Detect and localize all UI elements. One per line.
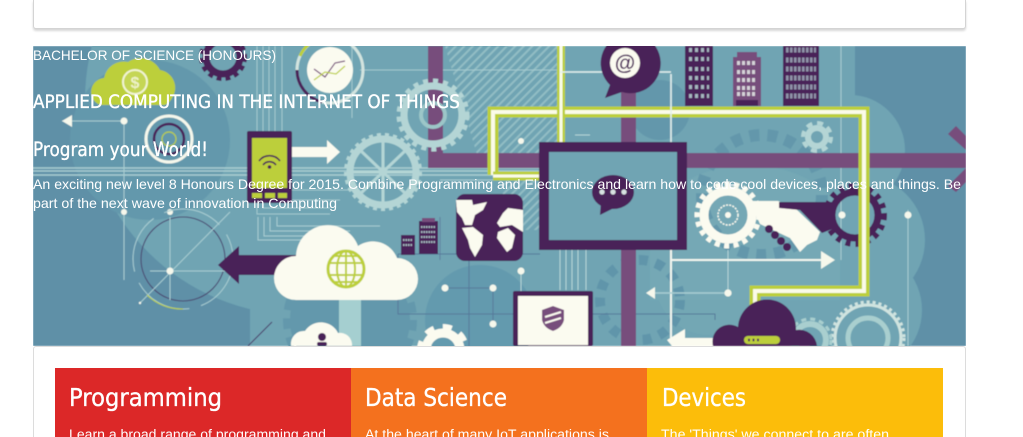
tagline: Program your World! [33, 138, 208, 161]
buildings [685, 46, 819, 106]
right arrow head [821, 251, 835, 269]
yellow-green circuit lines [493, 46, 864, 340]
degree label: BACHELOR OF SCIENCE (HONOURS) [33, 47, 276, 63]
green cloud with coin: $ [131, 75, 140, 92]
description line two: part of the next wave of innovation in Computing [33, 195, 337, 211]
small node dots [120, 118, 912, 328]
dark cloud with pill [712, 299, 817, 346]
banner illustration [33, 46, 966, 346]
small left arrow near dot [646, 287, 732, 299]
white cloud with globe [274, 225, 418, 300]
course title: APPLIED COMPUTING IN THE INTERNET OF THINGS [33, 91, 460, 113]
panel: programming [55, 368, 351, 437]
panel: devices [647, 368, 943, 437]
phone with wifi [247, 131, 292, 203]
stem under cloud [339, 298, 361, 346]
circuit lines [33, 46, 908, 346]
devices heading: Devices [662, 383, 746, 412]
handshake [750, 201, 835, 252]
bottom card [33, 346, 966, 437]
purple left arrow [218, 246, 300, 284]
dark gear [826, 186, 884, 244]
white bottom arrow [667, 329, 725, 346]
ring target [146, 116, 192, 162]
small city [401, 218, 438, 255]
data science heading: Data Science [365, 383, 507, 412]
top card [33, 0, 966, 29]
monitor [544, 147, 682, 245]
thin radar circle [133, 209, 240, 309]
green cloud with coin [91, 58, 175, 105]
programming heading: Programming [69, 383, 222, 412]
background shapes [33, 0, 966, 380]
banner text [33, 47, 961, 211]
white right arrow [292, 140, 340, 164]
world map tile [456, 194, 523, 261]
purple pipes [428, 46, 966, 346]
description line one: An exciting new level 8 Honours Degree for 2015. Combine Programming and Electronics and learn how to code cool devices, places and things. Be [33, 176, 961, 192]
speech bubble with at sign [601, 33, 661, 98]
laptop with shield [513, 291, 593, 346]
hatch areas [445, 46, 560, 230]
chart circle [297, 37, 363, 103]
small left arrow [62, 115, 72, 127]
speech bubble with at sign: @ [615, 52, 635, 75]
gears [201, 35, 904, 374]
panel: data science [351, 368, 647, 437]
small cloud with person [291, 322, 352, 346]
